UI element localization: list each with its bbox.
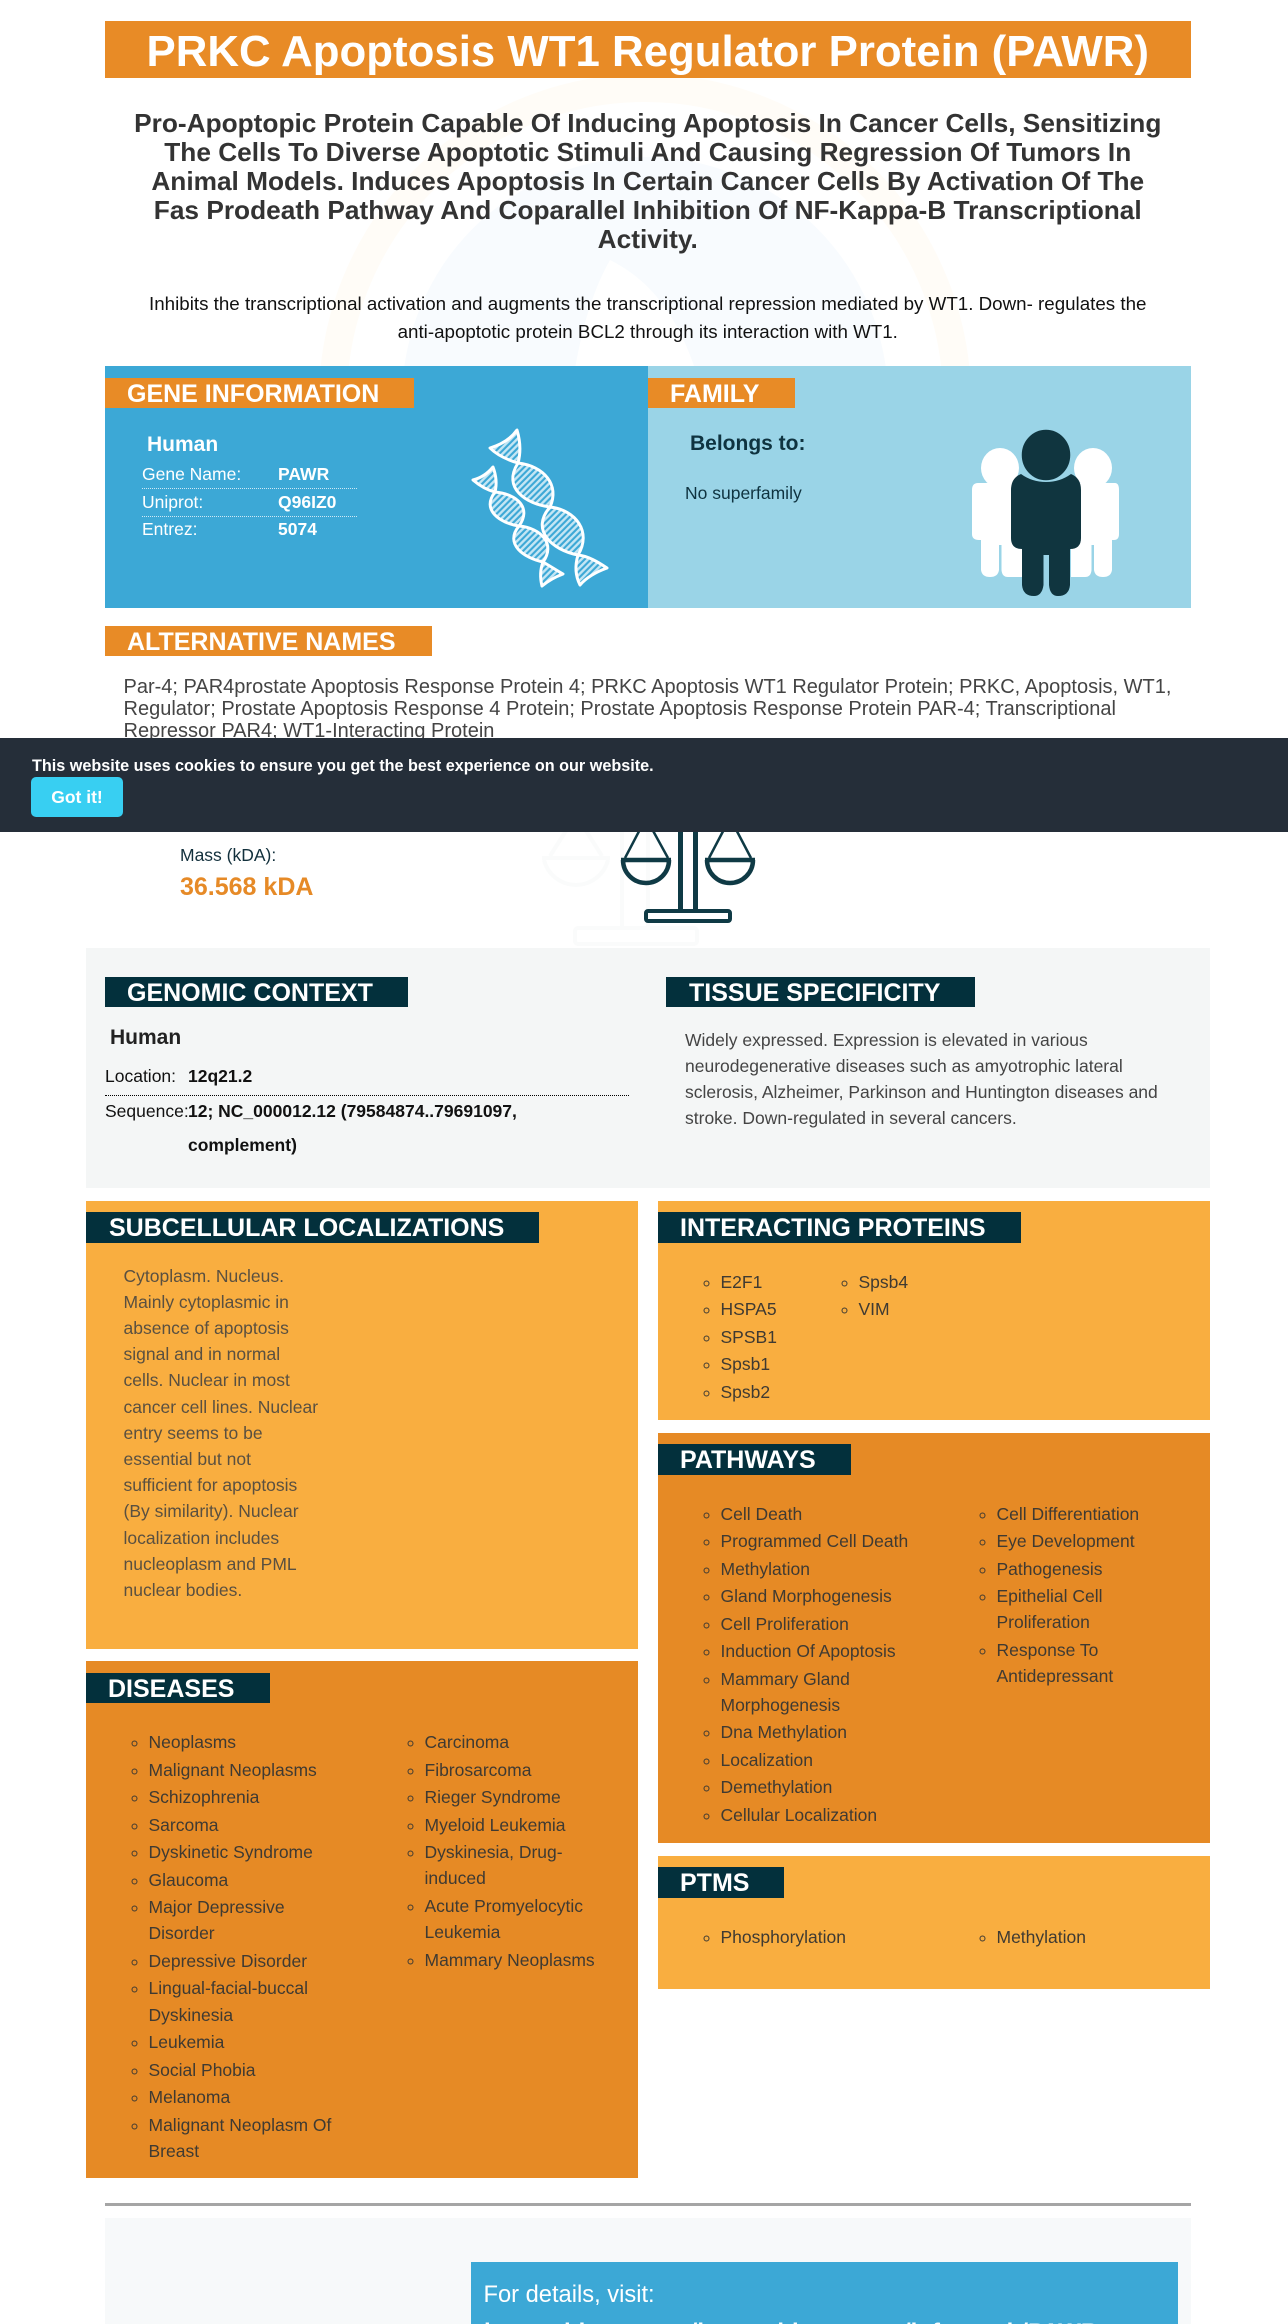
pathway list column 2: Cell Differentiation [996,1504,1139,1524]
disease list column 1: Malignant Neoplasm Of [148,2114,331,2134]
tissue specificity text: Widely expressed. Expression is elevated in various [685,1030,1088,1050]
pathway list column 2: Epithelial Cell [996,1586,1103,1606]
localization text: absence of apoptosis [124,1318,289,1338]
disease list column 2: Carcinoma [424,1732,509,1752]
pathway list column 2: Antidepressant [996,1666,1113,1686]
subtitle: protein function summary: Animal Models. Induces Apoptosis In Certain Cancer Cells By Activation Of The [151,166,1144,196]
disease list column 1: Leukemia [148,2032,224,2052]
disease list column 1: Melanoma [148,2087,230,2107]
background watermark logo [0,0,1288,960]
alternative names text: Repressor PAR4; WT1-Interacting Protein [124,720,494,742]
uniprot row: Q96IZ0 [278,492,336,512]
pathway list column 1: Cell Proliferation [720,1614,849,1634]
pathway list column 1: Dna Methylation [720,1722,847,1742]
pathway list column 1: Cell Death [720,1504,802,1524]
cookie consent banner [0,738,1288,832]
sequence row [105,1100,517,1154]
pathway list column 2: Eye Development [996,1531,1135,1551]
localization text: Mainly cytoplasmic in [124,1292,289,1312]
pathway list column 1: Localization [720,1750,813,1770]
disease list column 2: Dyskinesia, Drug- [424,1842,563,1862]
species label: Human [110,1026,181,1048]
localization text: Cytoplasm. Nucleus. [124,1266,284,1286]
description paragraph: Inhibits the transcriptional activation and augments the transcriptional repression mediated by WT1. Down- regulates the [149,293,1146,314]
disease list column 2: Mammary Neoplasms [424,1950,595,1970]
heading: diseases: DISEASES [108,1675,234,1703]
disease list column 2: Fibrosarcoma [424,1760,531,1780]
location row: Location: [105,1066,176,1086]
belongs to label: Belongs to: [690,432,806,455]
disease list column 1: Disorder [148,1923,215,1943]
entrez row: 5074 [278,519,317,539]
uniprot row: Uniprot: [142,492,203,512]
disease list column 2: induced [424,1868,486,1888]
pathway list column 1: Methylation [720,1558,810,1578]
heading: alternative names: ALTERNATIVE NAMES [127,628,396,656]
tissue specificity text: stroke. Down-regulated in several cancers. [685,1108,1017,1128]
disease list column 1: Sarcoma [148,1814,219,1834]
protein list column 1 [704,1272,777,1402]
superfamily value: No superfamily [685,483,802,503]
heading: pathways [658,1444,851,1475]
protein list column 1: SPSB1 [720,1326,777,1346]
protein list column 1: Spsb2 [720,1382,770,1402]
panel: family [648,366,1190,608]
sequence row: 12; NC_000012.12 (79584874..79691097, [188,1100,517,1120]
heading: PTMs: PTMS [680,1869,749,1897]
protein list column 2: Spsb4 [858,1272,908,1292]
sequence row: Sequence: [105,1100,189,1120]
heading: gene information: GENE INFORMATION [127,380,379,408]
subtitle: protein function summary: Activity. [598,224,698,254]
panel: interacting proteins [658,1201,1210,1420]
panel: subcellular localizations [86,1201,638,1649]
disease list column 1: Social Phobia [148,2060,256,2080]
disease list column 1: Dyskinesia [148,2004,233,2024]
protein list column 2 [842,1272,908,1319]
details label: For details, visit: [484,2282,655,2308]
protein list column 1: HSPA5 [720,1299,777,1319]
localization text: localization includes [124,1528,279,1548]
localization text [124,1266,318,1600]
gene name row [142,461,357,489]
disease list column 2: Myeloid Leukemia [424,1814,566,1834]
localization text: (By similarity). Nuclear [124,1501,299,1521]
disease list column 1: Glaucoma [148,1870,228,1890]
protein list column 1: E2F1 [720,1272,762,1292]
pathway list column 2: Proliferation [996,1612,1090,1632]
panel: gene information [105,366,648,608]
tissue specificity text [685,1030,1158,1128]
description paragraph [149,293,1146,342]
pathway list column 1: Gland Morphogenesis [720,1586,892,1606]
heading: PTMs [658,1867,784,1898]
heading: genomic context: GENOMIC CONTEXT [127,979,373,1007]
localization text: sufficient for apoptosis [124,1475,297,1495]
panel: genomic context and tissue specificity [86,948,1210,1188]
subtitle: protein function summary [134,108,1161,254]
disease list column 1: Lingual-facial-buccal [148,1978,308,1998]
tissue specificity text: neurodegenerative diseases such as amyotrophic lateral [685,1056,1123,1076]
heading: family [648,378,794,408]
alternative names text: Par-4; PAR4prostate Apoptosis Response Protein 4; PRKC Apoptosis WT1 Regulator Protein; PRKC, Apoptosis, WT1, [124,676,1171,698]
pathway list column 1 [704,1504,908,1825]
tissue specificity text: sclerosis, Alzheimer, Parkinson and Huntington diseases and [685,1082,1158,1102]
heading: pathways: PATHWAYS [680,1446,816,1474]
subtitle: protein function summary: The Cells To Diverse Apoptotic Stimuli And Causing Regression Of Tumors In [164,136,1131,166]
mass value: 36.568 kDA [180,873,313,901]
pathway list column 1: Morphogenesis [720,1695,840,1715]
uniprot row [142,489,357,517]
disease list column 1: Dyskinetic Syndrome [148,1842,313,1862]
pathway list column 2: Response To [996,1640,1098,1660]
PTM list column 1: Phosphorylation [720,1926,846,1946]
localization text: nuclear bodies. [124,1580,242,1600]
disease list column 2: Rieger Syndrome [424,1787,561,1807]
pathway list column 1: Cellular Localization [720,1805,877,1825]
disease list column 2: Leukemia [424,1922,500,1942]
pathway list column 1: Mammary Gland [720,1668,850,1688]
pathway list column 1: Programmed Cell Death [720,1531,908,1551]
localization text: nucleoplasm and PML [124,1554,297,1574]
localization text: cancer cell lines. Nuclear [124,1397,318,1417]
pathway list column 1: Induction Of Apoptosis [720,1641,896,1661]
alternative names text [124,676,1171,742]
pathway list column 2 [980,1504,1139,1686]
disease list column 1: Major Depressive [148,1897,285,1917]
button: got it [31,777,123,817]
protein list column 1: Spsb1 [720,1354,770,1374]
heading: subcellular localizations: SUBCELLULAR LOCALIZATIONS [109,1214,504,1242]
gene name row: PAWR [278,464,329,484]
disease list column 2 [408,1732,595,1970]
PTM list column 2: Methylation [996,1926,1086,1946]
gene name row: Gene Name: [142,464,241,484]
disease list column 1: Depressive Disorder [148,1951,307,1971]
location row: 12q21.2 [188,1066,252,1086]
disease list column 1: Breast [148,2141,199,2161]
location row [105,1062,629,1096]
icon: balance scales [620,832,756,923]
localization text: signal and in normal [124,1344,280,1364]
localization text: entry seems to be [124,1423,263,1443]
subtitle: protein function summary: Fas Prodeath Pathway And Coparallel Inhibition Of NF-Kappa-B Transcriptional [154,194,1142,224]
disease list column 1: Malignant Neoplasms [148,1760,317,1780]
species label: Human [147,433,218,456]
heading: family: FAMILY [670,380,759,408]
localization text: cells. Nuclear in most [124,1370,290,1390]
sequence row: complement) [188,1134,297,1154]
disease list column 1: Schizophrenia [148,1787,259,1807]
subtitle: protein function summary: Pro-Apoptopic Protein Capable Of Inducing Apoptosis In Cancer Cells, Sensitizing [134,108,1161,138]
pathway list column 1: Demethylation [720,1777,832,1797]
alternative names text: Regulator; Prostate Apoptosis Response 4 Protein; Prostate Apoptosis Response Protein PAR-4; Transcriptional [124,698,1116,720]
disease list column 1 [132,1732,332,2161]
title banner: PRKC Apoptosis WT1 Regulator Protein (PAWR) [147,27,1149,76]
callout: details link [471,2262,1178,2324]
pathway list column 2: Pathogenesis [996,1558,1103,1578]
panel: PTMs [658,1856,1210,1989]
panel: footer [105,2218,1190,2324]
disease list column 2: Acute Promyelocytic [424,1896,583,1916]
disease list column 1: Neoplasms [148,1732,236,1752]
entrez row: Entrez: [142,519,197,539]
heading: interacting proteins: INTERACTING PROTEINS [680,1214,986,1242]
panel: pathways [658,1433,1210,1843]
cookie message: This website uses cookies to ensure you get the best experience on our website. [32,757,654,775]
icon: group of people [972,430,1119,596]
heading: diseases [86,1673,270,1703]
heading: tissue specificity: TISSUE SPECIFICITY [689,979,940,1007]
icon: DNA helix [472,428,609,588]
entrez row [142,519,317,539]
localization text: essential but not [124,1449,251,1469]
description paragraph: anti-apoptotic protein BCL2 through its interaction with WT1. [398,321,898,342]
panel: diseases [86,1661,638,2178]
protein list column 2: VIM [858,1299,890,1319]
button: got it: Got it! [51,787,103,807]
mass label: Mass (kDA): [180,845,276,865]
